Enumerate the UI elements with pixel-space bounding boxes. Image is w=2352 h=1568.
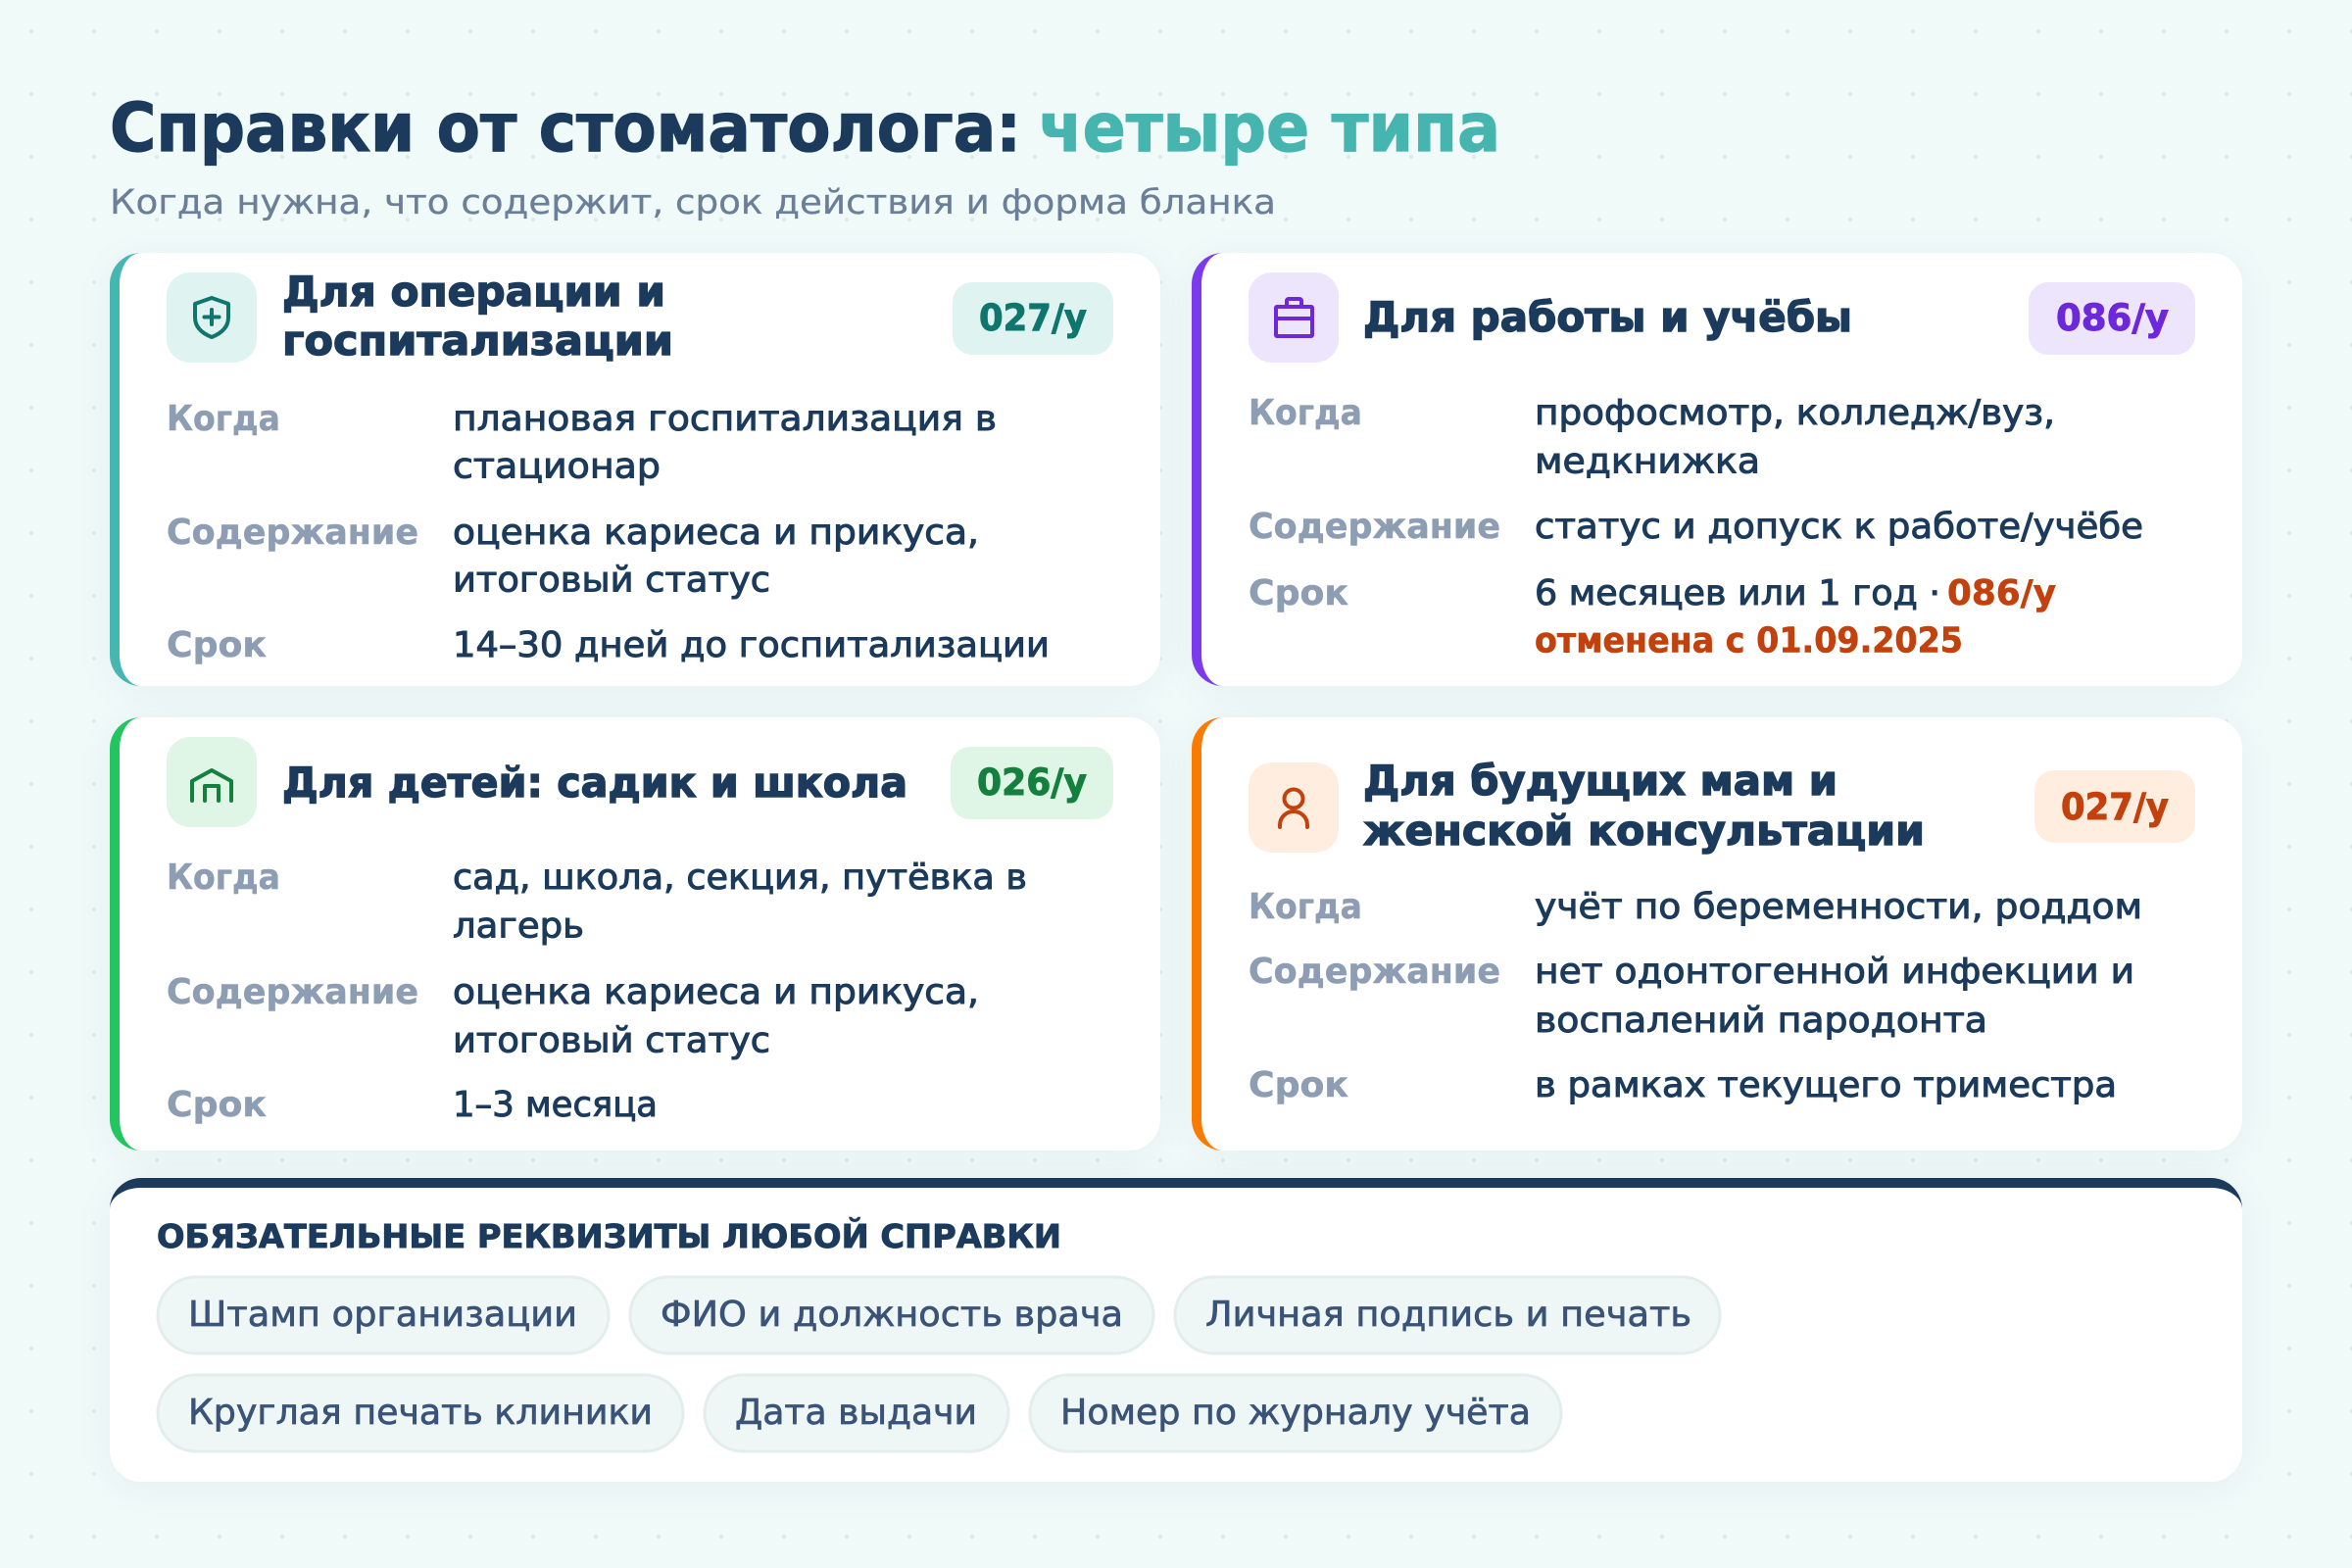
form badge 027/у: 027/у xyxy=(2061,786,2169,828)
card heading: Для работы и учёбы xyxy=(1363,293,1852,341)
chip: signature and seal xyxy=(1175,1277,1720,1353)
row: contents: статус и допуск к работе/учёбе xyxy=(1535,507,2143,547)
row: when xyxy=(167,399,997,486)
row: when: лагерь xyxy=(453,906,584,947)
row: contents: воспалений пародонта xyxy=(1535,1001,1987,1041)
chip: organization stamp xyxy=(158,1277,609,1353)
card heading: Для будущих мам и xyxy=(1363,757,1838,805)
row: when: стационар xyxy=(453,447,661,486)
row: contents: итоговый статус xyxy=(453,561,770,600)
row: contents: оценка кариеса и прикуса, xyxy=(453,513,979,553)
panel: for work and study xyxy=(1192,253,2242,686)
row: when: плановая госпитализация в xyxy=(453,399,997,439)
card heading: Для операции и xyxy=(282,268,665,316)
form badge 027/у xyxy=(2034,770,2195,843)
title: Справки от стоматолога: xyxy=(110,89,1021,168)
form badge 026/у: 026/у xyxy=(977,761,1087,804)
row: term: Срок xyxy=(1249,1065,1348,1105)
row: contents xyxy=(167,513,979,600)
row: when: Когда xyxy=(167,858,280,898)
row: contents xyxy=(1249,507,2143,547)
row: when xyxy=(1249,887,2142,927)
row: term and warning: 086/у xyxy=(1947,573,2056,613)
row: term: Срок xyxy=(167,1085,267,1125)
row: term and warning: 6 месяцев или 1 год · xyxy=(1535,573,1940,613)
panel: for children xyxy=(110,717,1160,1151)
row: when xyxy=(167,858,1027,947)
icon: briefcase xyxy=(1249,272,1339,363)
row: term: 14–30 дней до госпитализации xyxy=(453,625,1050,665)
row: term: 1–3 месяца xyxy=(453,1085,658,1125)
row: term: в рамках текущего триместра xyxy=(1535,1065,2117,1105)
row: when: медкнижка xyxy=(1535,441,1760,482)
panel heading: ОБЯЗАТЕЛЬНЫЕ РЕКВИЗИТЫ ЛЮБОЙ СПРАВКИ xyxy=(157,1216,1061,1255)
chip: organization stamp: Штамп организации xyxy=(188,1295,577,1335)
row: when: сад, школа, секция, путёвка в xyxy=(453,858,1027,898)
row: contents: Содержание xyxy=(1249,507,1500,547)
subtitle: Когда нужна, что содержит, срок действия и форма бланка xyxy=(110,183,1276,222)
form badge 026/у xyxy=(951,747,1113,819)
header xyxy=(110,89,1500,222)
panel: mandatory details xyxy=(110,1178,2242,1482)
form badge 086/у: 086/у xyxy=(2056,297,2169,339)
row: when: Когда xyxy=(1249,393,1362,433)
card heading: Для детей: садик и школа xyxy=(282,759,907,807)
row: term xyxy=(167,625,1050,665)
form badge 086/у xyxy=(2029,282,2195,355)
row: term and warning: отменена с 01.09.2025 xyxy=(1535,621,1963,661)
row: contents: Содержание xyxy=(167,513,418,553)
row: when: Когда xyxy=(1249,887,1362,927)
row: term and warning xyxy=(1249,573,2056,661)
title: четыре типа xyxy=(1039,89,1500,168)
card heading: женской консультации xyxy=(1363,807,1925,855)
row: contents xyxy=(167,972,979,1060)
row: term xyxy=(1249,1065,2117,1105)
chip: signature and seal: Личная подпись и печать xyxy=(1205,1295,1691,1335)
chip: issue date xyxy=(705,1375,1008,1451)
card heading xyxy=(282,268,673,365)
row: when: Когда xyxy=(167,399,280,439)
form badge 027/у xyxy=(953,282,1113,355)
row: contents: нет одонтогенной инфекции и xyxy=(1535,952,2134,992)
icon: person xyxy=(1249,762,1339,853)
row: when xyxy=(1249,393,2055,482)
chip: journal number xyxy=(1030,1375,1561,1451)
chip: doctor name and position: ФИО и должность врача xyxy=(661,1295,1123,1335)
row: term: Срок xyxy=(167,625,267,665)
card heading: госпитализации xyxy=(282,317,673,365)
row: when: профосмотр, колледж/вуз, xyxy=(1535,393,2055,433)
row: contents: Содержание xyxy=(167,972,418,1012)
row: when: учёт по беременности, роддом xyxy=(1535,887,2142,927)
panel: for surgery and hospitalization xyxy=(110,253,1160,686)
row: term and warning: Срок xyxy=(1249,573,1348,613)
chip: doctor name and position xyxy=(630,1277,1153,1353)
icon: shield xyxy=(167,272,257,363)
icon: house xyxy=(167,737,257,827)
row: contents xyxy=(1249,952,2134,1041)
panel: for expectant mothers xyxy=(1192,717,2242,1151)
form badge 027/у: 027/у xyxy=(979,297,1087,339)
row: contents: оценка кариеса и прикуса, xyxy=(453,972,979,1012)
chip: round clinic seal xyxy=(158,1375,683,1451)
chip: issue date: Дата выдачи xyxy=(735,1393,977,1433)
row: term xyxy=(167,1085,658,1125)
chip: round clinic seal: Круглая печать клиники xyxy=(188,1393,653,1433)
chip: journal number: Номер по журналу учёта xyxy=(1060,1393,1531,1433)
row: contents: итоговый статус xyxy=(453,1021,770,1060)
row: contents: Содержание xyxy=(1249,952,1500,992)
card heading xyxy=(1363,757,1925,855)
